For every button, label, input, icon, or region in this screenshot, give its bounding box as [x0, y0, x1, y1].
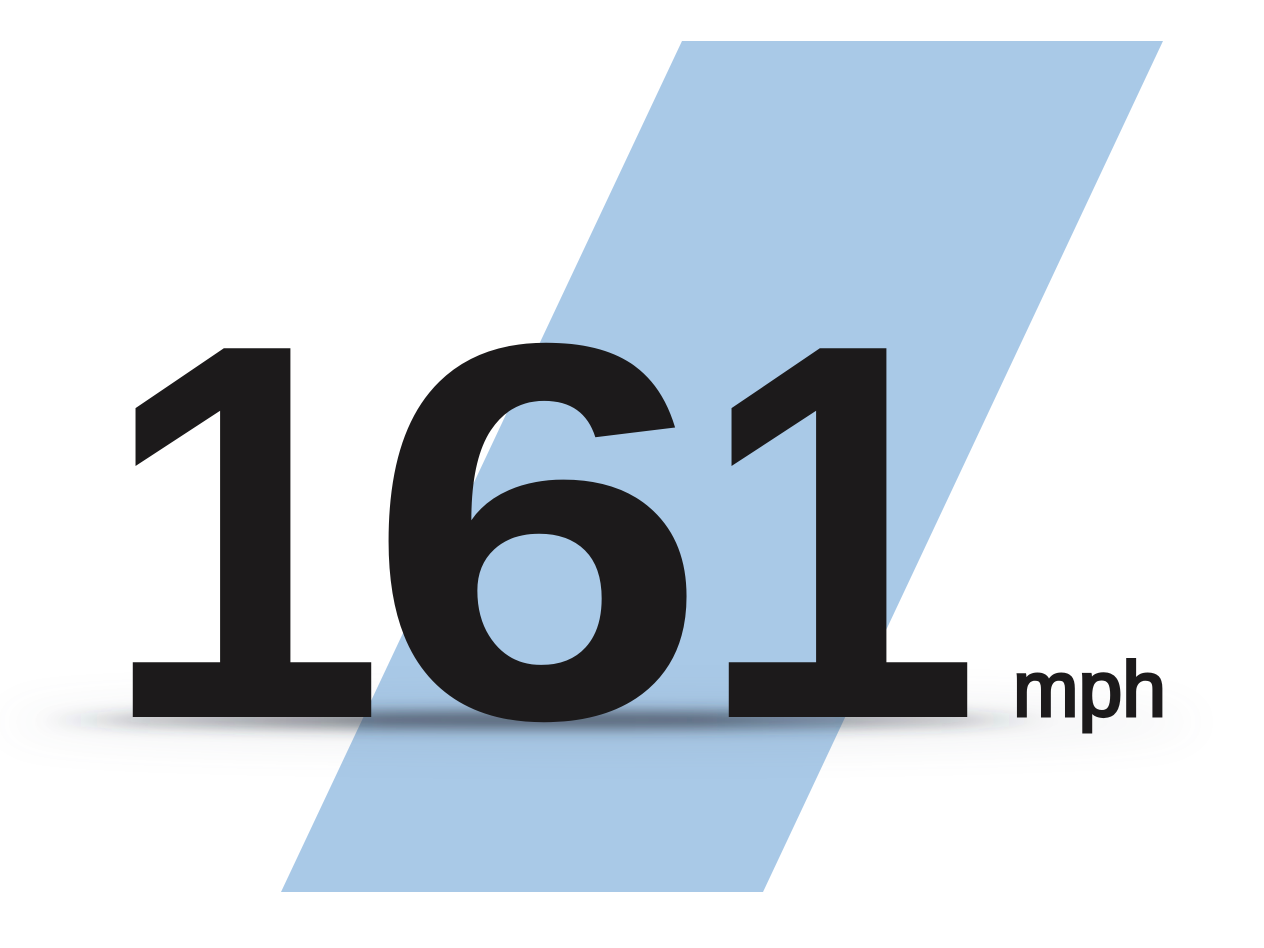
big number 161: 1 — [100, 232, 385, 831]
big number 161: 6 — [366, 233, 709, 831]
ground shadow — [0, 702, 1200, 742]
big number 161: 1 — [696, 232, 981, 831]
unit label mph: mph — [1013, 645, 1166, 733]
blue parallelogram background — [281, 41, 1163, 892]
big number 161 — [100, 232, 981, 831]
